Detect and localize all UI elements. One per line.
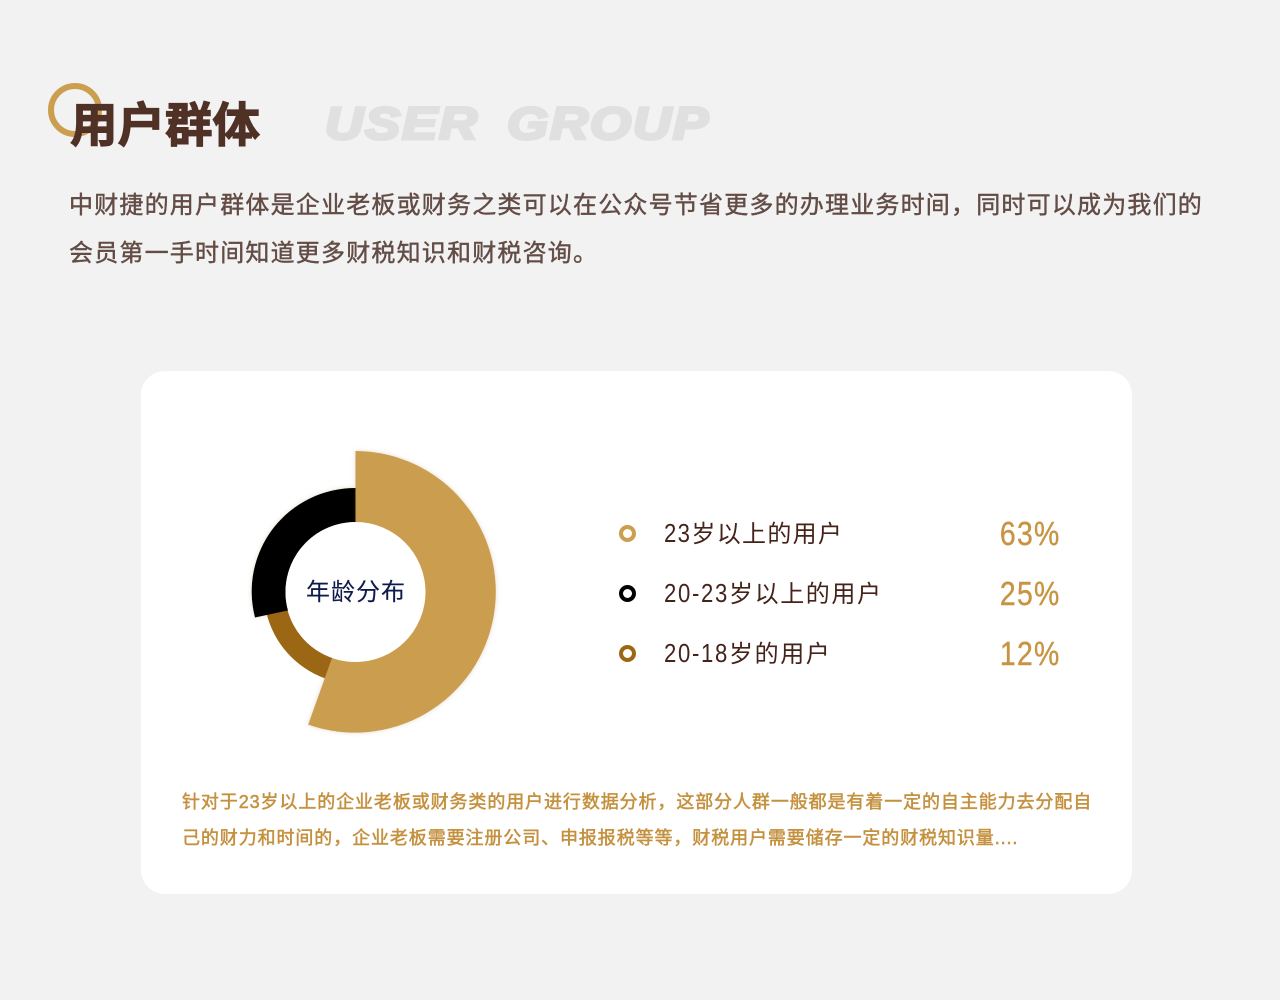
intro text bbox=[69, 192, 1203, 267]
analysis text: 己的财力和时间的，企业老板需要注册公司、申报报税等等，财税用户需要储存一定的财税知识量.... bbox=[182, 828, 1018, 848]
legend row: 23岁以上 bbox=[619, 515, 1061, 552]
donut center label: 年龄分布 bbox=[306, 579, 406, 606]
legend label bbox=[664, 578, 883, 608]
legend marker bbox=[619, 585, 636, 602]
legend label bbox=[664, 638, 831, 668]
legend row: 20-18岁 bbox=[619, 635, 1061, 672]
center hole bbox=[286, 522, 426, 662]
legend marker bbox=[619, 525, 636, 542]
segment: 63% bbox=[308, 451, 496, 733]
segment: 12% bbox=[266, 608, 332, 678]
legend label: 23 bbox=[664, 518, 691, 548]
intro text: 会员第一手时间知道更多财税知识和财税咨询。 bbox=[69, 240, 598, 267]
legend marker bbox=[619, 645, 636, 662]
legend label: 岁以上的用户 bbox=[729, 581, 883, 608]
english title: USER GROUP bbox=[325, 98, 710, 149]
legend label: 岁的用户 bbox=[729, 641, 831, 668]
legend label: 岁以上的用户 bbox=[691, 521, 843, 548]
percentage: 25% bbox=[1000, 575, 1061, 612]
panel: age distribution card bbox=[141, 371, 1132, 894]
legend label: 20-23 bbox=[664, 578, 729, 608]
legend row: 20-23岁以上 bbox=[619, 575, 1061, 612]
analysis text bbox=[182, 792, 1092, 848]
donut chart bbox=[250, 449, 498, 735]
segment: 25% bbox=[252, 488, 356, 618]
title: 用户群体 bbox=[70, 100, 260, 153]
percentage: 12% bbox=[1000, 635, 1061, 672]
analysis text: 针对于23岁以上的企业老板或财务类的用户进行数据分析，这部分人群一般都是有着一定的自主能力去分配自 bbox=[182, 792, 1092, 812]
icon: title ring bbox=[48, 83, 102, 137]
legend label: 20-18 bbox=[664, 638, 729, 668]
percentage: 63% bbox=[1000, 515, 1061, 552]
intro text: 中财捷的用户群体是企业老板或财务之类可以在公众号节省更多的办理业务时间，同时可以成为我们的 bbox=[69, 192, 1203, 219]
